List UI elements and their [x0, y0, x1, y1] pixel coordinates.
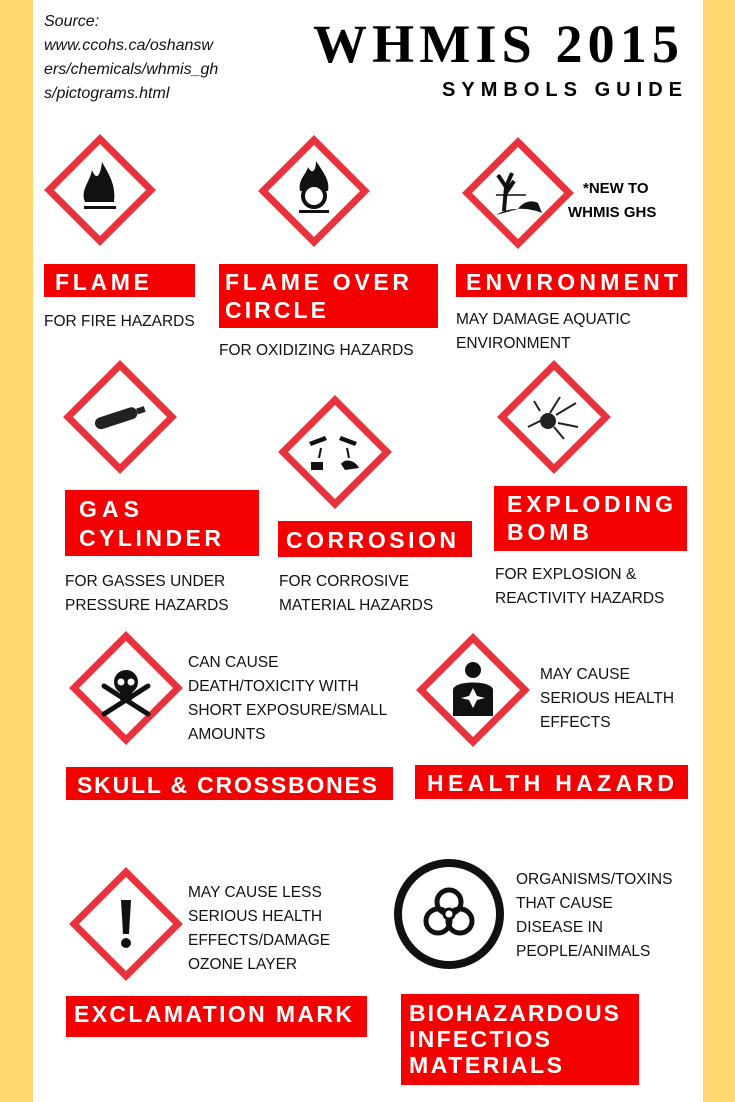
icon: environment: [467, 142, 569, 244]
label: biohazardous: INFECTIOS: [409, 1026, 550, 1052]
desc: environment: ENVIRONMENT: [456, 335, 571, 352]
icon: exclamation: [74, 872, 178, 976]
desc: exclamation: MAY CAUSE LESS: [188, 884, 322, 901]
title: SYMBOLS GUIDE: [442, 79, 682, 101]
icon: flame: [49, 139, 151, 241]
desc: health hazard: SERIOUS HEALTH: [540, 690, 674, 707]
icon: corrosion: [283, 400, 387, 504]
label: flame: FLAME: [55, 269, 149, 295]
icon: health hazard: [421, 638, 525, 742]
label: skull & crossbones: SKULL & CROSSBONES: [77, 772, 377, 798]
source text: www.ccohs.ca/oshansw: [44, 37, 214, 54]
label: environment: ENVIRONMENT: [466, 269, 678, 295]
desc: biohazard: DISEASE IN: [516, 919, 603, 936]
desc: corrosion: FOR CORROSIVE: [279, 573, 409, 590]
source text: Source:: [44, 13, 99, 30]
desc: exploding bomb: FOR EXPLOSION &: [495, 566, 637, 583]
icon: gas cylinder: [68, 365, 172, 469]
title: WHMIS 2015: [313, 14, 679, 74]
label: exploding bomb: [494, 486, 687, 551]
label: exclamation mark: EXCLAMATION MARK: [74, 1001, 352, 1027]
desc: skull: DEATH/TOXICITY WITH: [188, 678, 359, 695]
desc: exploding bomb: REACTIVITY HAZARDS: [495, 590, 664, 607]
desc: skull: AMOUNTS: [188, 726, 266, 743]
desc: biohazard: ORGANISMS/TOXINS: [516, 871, 672, 888]
desc: corrosion: [279, 573, 433, 614]
label: flame over circle: [219, 264, 438, 328]
icon: exploding bomb: [502, 365, 606, 469]
desc: health hazard: [540, 666, 674, 731]
desc: exploding bomb: [495, 566, 664, 607]
label: biohazardous: BIOHAZARDOUS: [409, 1000, 619, 1026]
desc: health hazard: EFFECTS: [540, 714, 611, 731]
desc: biohazard: PEOPLE/ANIMALS: [516, 943, 650, 960]
label: biohazardous: MATERIALS: [409, 1052, 562, 1078]
label: flame over circle: CIRCLE: [225, 297, 326, 323]
new to whmis note: *NEW TO: [583, 180, 649, 197]
desc: environment: MAY DAMAGE AQUATIC: [456, 311, 631, 328]
label: gas cylinder: GAS: [79, 496, 139, 522]
desc: health hazard: MAY CAUSE: [540, 666, 630, 683]
desc: gas cylinder: [65, 573, 229, 614]
desc: skull: SHORT EXPOSURE/SMALL: [188, 702, 388, 719]
desc: flame over circle: FOR OXIDIZING HAZARDS: [219, 342, 414, 359]
label: exclamation mark: [66, 996, 367, 1037]
desc: biohazard: THAT CAUSE: [516, 895, 613, 912]
desc: skull: [188, 654, 388, 743]
desc: flame: FOR FIRE HAZARDS: [44, 313, 195, 330]
label: health hazard: [415, 765, 688, 799]
desc: skull: CAN CAUSE: [188, 654, 278, 671]
desc: exclamation: EFFECTS/DAMAGE: [188, 932, 330, 949]
desc: gas cylinder: FOR GASSES UNDER: [65, 573, 225, 590]
label: corrosion: [278, 521, 472, 557]
label: exploding bomb: BOMB: [507, 519, 589, 545]
label: flame over circle: FLAME OVER: [225, 269, 409, 295]
desc: exclamation: SERIOUS HEALTH: [188, 908, 322, 925]
label: gas cylinder: CYLINDER: [79, 525, 221, 551]
desc: exclamation: OZONE LAYER: [188, 956, 297, 973]
source text: s/pictograms.html: [44, 85, 170, 102]
label: health hazard: HEALTH HAZARD: [427, 770, 674, 796]
desc: gas cylinder: PRESSURE HAZARDS: [65, 597, 229, 614]
desc: exclamation: [188, 884, 330, 973]
new to whmis note: WHMIS GHS: [568, 204, 656, 221]
icon: flame over circle: [263, 140, 365, 242]
label: biohazardous: [401, 994, 639, 1085]
source text: ers/chemicals/whmis_gh: [44, 61, 218, 78]
icon: skull: [74, 636, 178, 740]
label: gas cylinder: [65, 490, 259, 556]
source text: [44, 13, 218, 102]
label: corrosion: CORROSION: [286, 527, 456, 553]
desc: environment: [456, 311, 631, 352]
desc: corrosion: MATERIAL HAZARDS: [279, 597, 433, 614]
icon: biohazard: [398, 863, 500, 965]
label: flame: [44, 264, 195, 297]
desc: biohazard: [516, 871, 672, 960]
label: exploding bomb: EXPLODING: [507, 491, 673, 517]
title: [313, 14, 682, 101]
new to whmis note: [568, 180, 656, 221]
